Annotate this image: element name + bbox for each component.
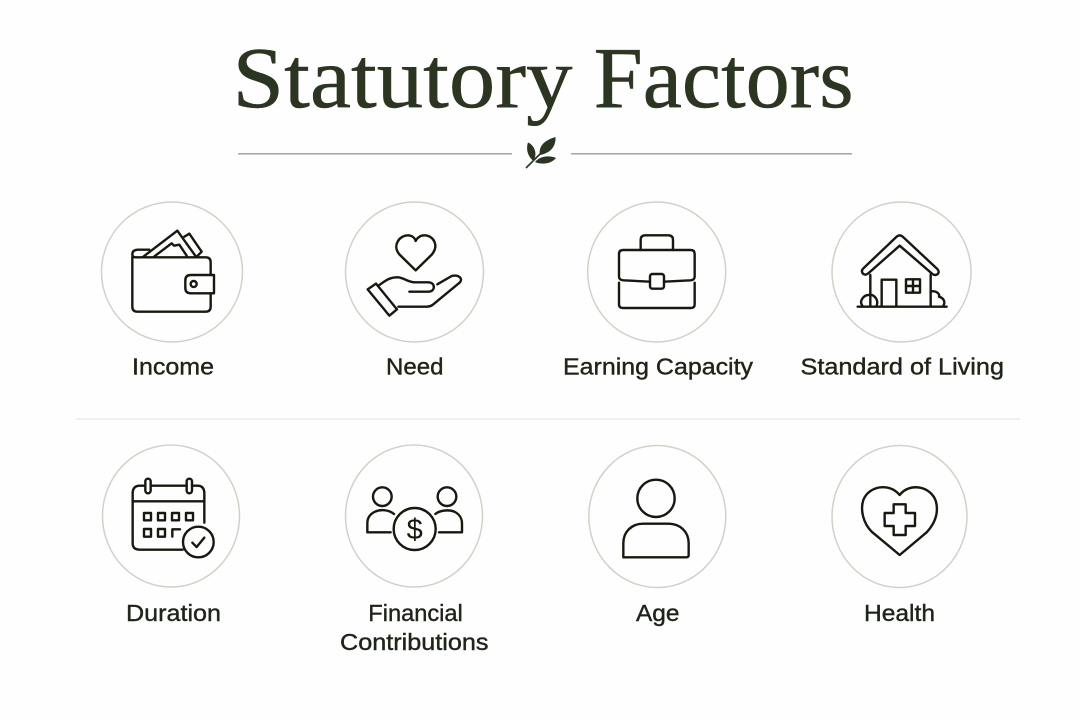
title divider with leaf: [238, 137, 852, 168]
label: Earning Capacity: Earning Capacity: [563, 354, 753, 380]
panel: duration: [102, 445, 240, 626]
label: Duration: Duration: [126, 600, 221, 626]
icon: heart in open hand: [368, 235, 461, 316]
panel: standard of living: [800, 202, 1004, 380]
panel: earning capacity: [563, 202, 753, 380]
title: Statutory: [232, 29, 573, 126]
icon: house: [858, 235, 947, 307]
title: Factors: [594, 29, 854, 126]
icon: calendar with check: [133, 479, 214, 557]
panel: health: [832, 446, 967, 626]
label: Financial Contributions: Financial: [368, 600, 463, 626]
icon: leaf sprig: [526, 137, 556, 168]
panel: need: [346, 202, 484, 380]
icon: two people with dollar coin: [367, 487, 462, 550]
label: Health: Health: [864, 600, 935, 626]
panel: income: [102, 202, 242, 380]
label: Need: Need: [386, 354, 444, 380]
label: Financial Contributions: Contributions: [340, 629, 488, 655]
icon: heart with cross: [862, 487, 937, 555]
label: Age: Age: [636, 600, 680, 626]
icon: wallet: [132, 231, 214, 312]
panel: financial contributions: [340, 445, 488, 655]
icon: briefcase: [619, 235, 695, 308]
label: Standard of Living: Standard of Living: [800, 354, 1004, 380]
panel: age: [589, 446, 726, 626]
icon: dollar sign: $: [407, 514, 423, 546]
label: Income: Income: [132, 354, 214, 380]
icon: person: [623, 480, 689, 557]
